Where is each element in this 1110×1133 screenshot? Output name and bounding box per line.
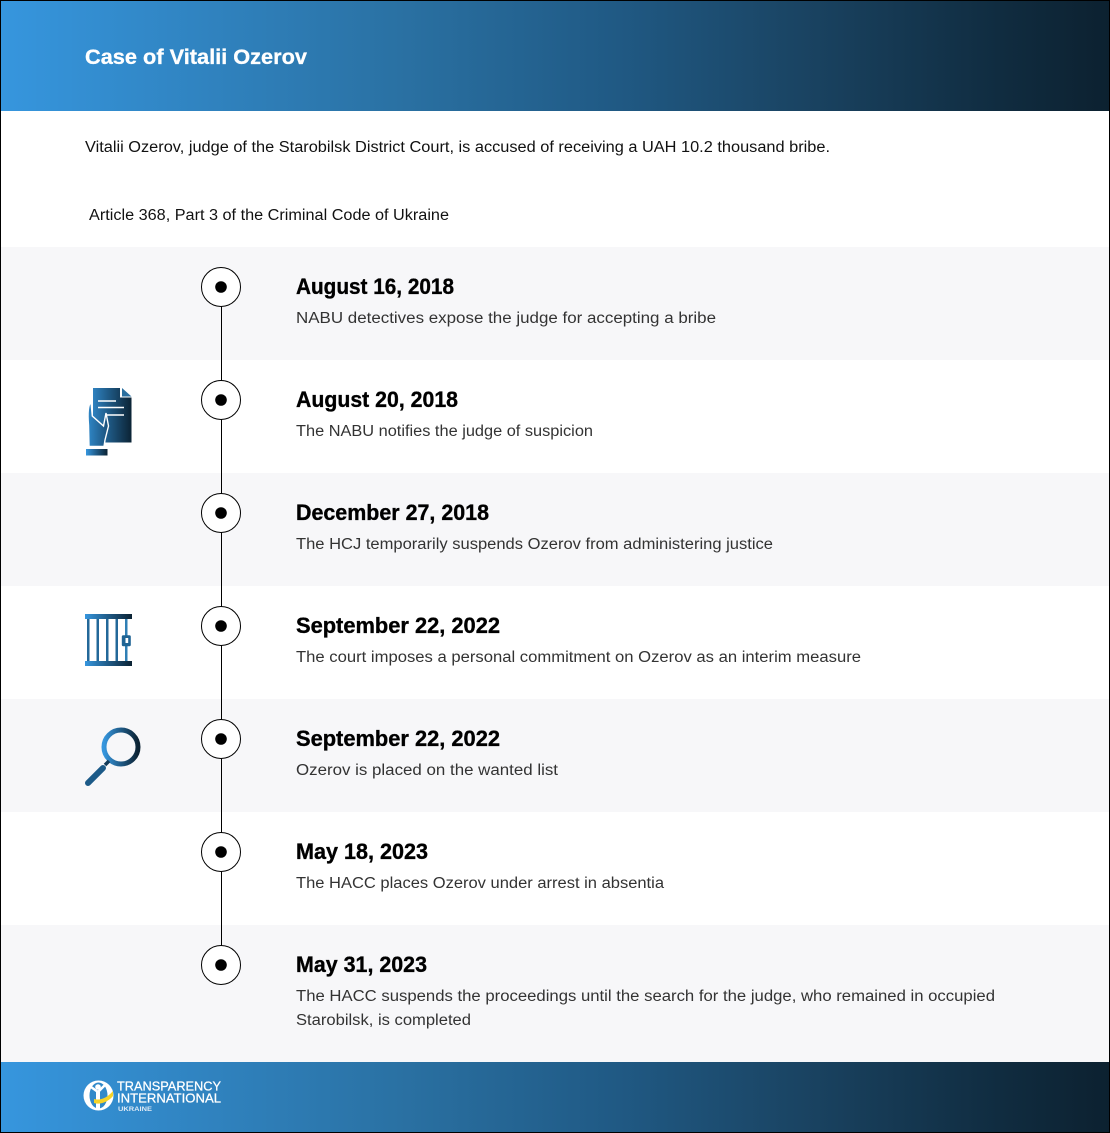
event: May 31, 2023: May 31, 2023	[296, 952, 427, 977]
event: May 31, 2023	[202, 946, 995, 1029]
logo: Transparency International Ukraine	[84, 1078, 221, 1113]
event: August 16, 2018: August 16, 2018	[296, 274, 454, 299]
event: May 18, 2023: May 18, 2023	[296, 839, 428, 864]
logo: Transparency International Ukraine: INTERNATIONAL	[117, 1090, 221, 1106]
icon: prison bars	[85, 614, 132, 666]
legal article reference: Article 368, Part 3 of the Criminal Code of Ukraine	[89, 207, 449, 224]
header banner	[0, 0, 1110, 111]
event: August 20, 2018: August 20, 2018	[296, 387, 458, 412]
event: August 20, 2018: The NABU notifies the judge of suspicion	[296, 423, 593, 440]
event: September 22, 2022 (wanted): September 22, 2022	[296, 726, 500, 751]
event: September 22, 2022	[202, 606, 861, 666]
icon: hand holding document	[86, 388, 132, 456]
icon: magnifying glass	[88, 730, 138, 783]
event: December 27, 2018: The HCJ temporarily suspends Ozerov from administering justice	[296, 536, 773, 553]
row backgrounds	[0, 247, 1110, 1062]
event: August 16, 2018: NABU detectives expose the judge for accepting a bribe	[296, 310, 716, 327]
intro text: Vitalii Ozerov, judge of the Starobilsk District Court, is accused of receiving a UAH 10.2 thousand bribe.	[85, 139, 830, 156]
event: May 18, 2023	[202, 832, 664, 892]
timeline line	[221, 287, 222, 965]
logo: Transparency International Ukraine: TRANSPARENCY	[117, 1078, 221, 1094]
footer banner	[0, 1062, 1110, 1132]
event: May 18, 2023: The HACC places Ozerov under arrest in absentia	[296, 875, 664, 892]
logo: Transparency International Ukraine: UKRAINE	[118, 1106, 153, 1113]
event: September 22, 2022 (wanted): Ozerov is placed on the wanted list	[296, 762, 559, 779]
event: December 27, 2018: December 27, 2018	[296, 500, 489, 525]
event: May 31, 2023: The HACC suspends the proceedings until the search for the judge, who remained in occupied	[296, 988, 995, 1005]
event: May 31, 2023: Starobilsk, is completed	[296, 1012, 471, 1029]
event: September 22, 2022: September 22, 2022	[296, 613, 500, 638]
event: August 16, 2018	[202, 268, 716, 327]
event: September 22, 2022 (wanted)	[202, 720, 559, 779]
event: December 27, 2018	[202, 494, 773, 553]
event: September 22, 2022: The court imposes a personal commitment on Ozerov as an interim measure	[296, 649, 861, 666]
title: Case of Vitalii Ozerov	[85, 46, 307, 69]
event: August 20, 2018	[202, 380, 593, 440]
